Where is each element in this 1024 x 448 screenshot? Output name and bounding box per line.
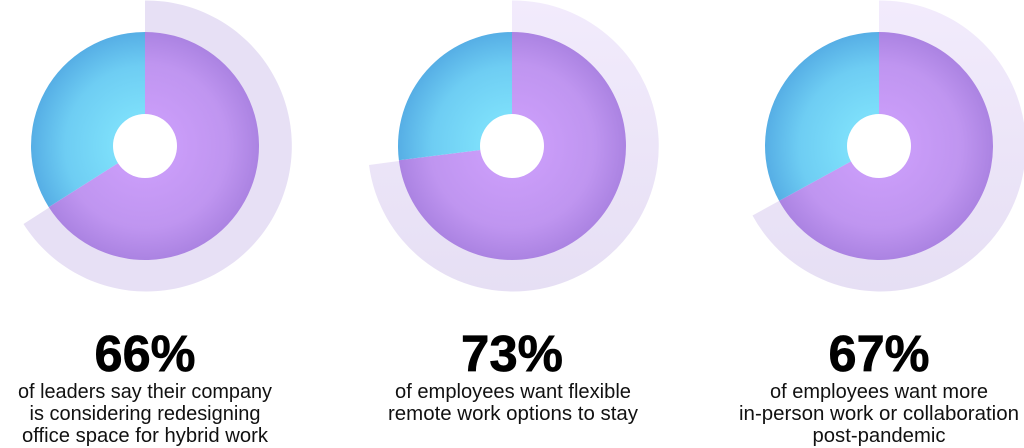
description: in-person work: post-pandemic [812,425,946,447]
purple slice: 66% [49,32,259,260]
purple slice: 67% [779,32,993,260]
description: in-person work [739,381,1019,447]
blue slice: 33% [765,32,879,201]
description: in-person work: of employees want more [770,381,988,403]
description: flexible remote work: remote work options to stay [388,403,638,425]
description: leaders [18,381,272,447]
donut chart: 73% [369,0,659,291]
description: in-person work: in-person work or collaboration [739,403,1019,425]
blue slice: 34% [31,32,145,207]
outer progress ring: 73% [369,0,659,291]
outer progress ring: 67% [752,0,1024,291]
description: leaders: office space for hybrid work [22,425,269,447]
description: flexible remote work [388,381,638,425]
purple slice: 73% [399,32,626,260]
figure: 67%: 67% [828,325,930,382]
center hole [480,114,544,178]
description: leaders: of leaders say their company [18,381,272,403]
panel: 66% leaders stat [18,0,292,447]
center hole [847,114,911,178]
description: flexible remote work: of employees want flexible [395,381,631,403]
outer progress ring: 66% [24,0,292,291]
blue slice: 27% [398,32,512,160]
donut chart: 66% [24,0,292,291]
description: leaders: is considering redesigning [30,403,260,425]
donut chart: 67% [752,0,1024,291]
figure: 73%: 73% [461,325,563,382]
figure: 66%: 66% [94,325,196,382]
panel: 73% employees stat [369,0,659,425]
center hole [113,114,177,178]
panel: 67% employees stat [739,0,1024,447]
